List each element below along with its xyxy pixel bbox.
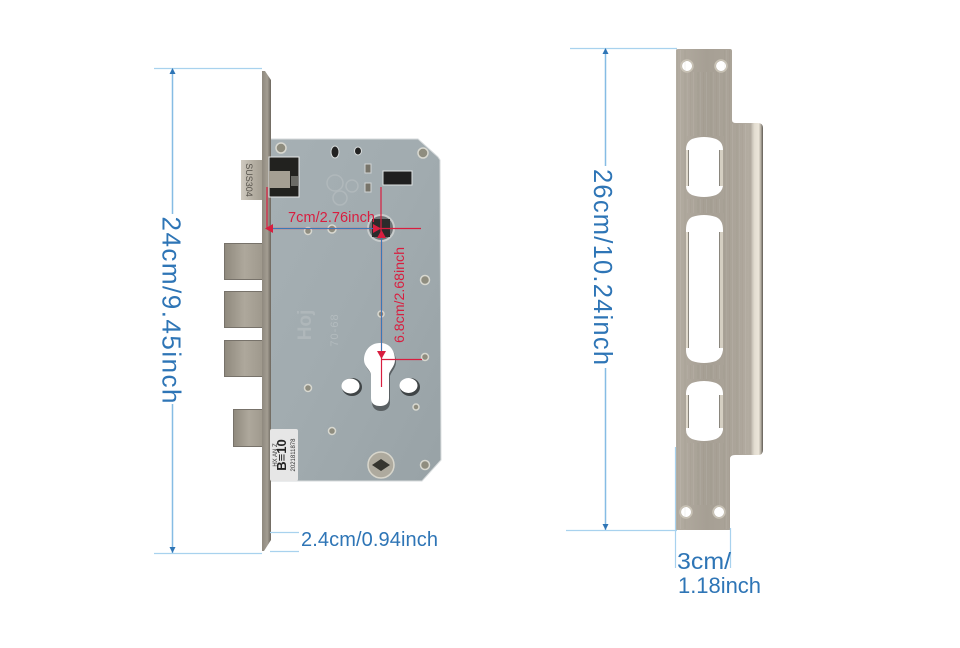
plate outline with slots and holes [676, 49, 763, 530]
right oval hole [400, 378, 420, 396]
product label: HX AN Z [273, 443, 279, 467]
product label: 2021811878 [291, 438, 297, 471]
strike plate width dimension [676, 447, 761, 598]
deadbolt 2 [224, 292, 264, 328]
lock mortise body [224, 71, 441, 551]
brushed metal texture [677, 50, 753, 529]
left oval hole [342, 378, 362, 396]
euro cylinder cutout [364, 343, 396, 411]
embossed brand text: Hoj [295, 310, 316, 340]
width label line 2: 1.18inch [678, 573, 761, 598]
faceplate width dimension [270, 529, 438, 552]
left height dimension [154, 68, 262, 554]
bottom keyhole screw [368, 452, 394, 478]
hole rings [680, 60, 727, 518]
deadbolt 1 [224, 244, 264, 280]
deadbolt 4 [234, 410, 264, 446]
latch bolt: SUS304 [244, 163, 254, 197]
spindle hub [368, 215, 394, 241]
slot bevels [686, 150, 723, 428]
small top holes [331, 146, 412, 192]
width label: 2.4cm/0.94inch [301, 529, 438, 551]
height label: 26cm/10.24inch [588, 169, 616, 365]
vertical red measure [377, 230, 422, 387]
vertical measure label: 6.8cm/2.68inch [391, 247, 407, 343]
strike plate [676, 49, 763, 530]
embossed model text: 70-68 [329, 313, 341, 347]
deadbolt 3 [224, 340, 264, 376]
product label: B≡10 [274, 439, 289, 471]
latch window [269, 157, 299, 197]
height label: 24cm/9.45inch [156, 216, 186, 404]
screws [276, 143, 430, 470]
right height dimension [566, 48, 677, 530]
product label [270, 429, 298, 481]
width label line 1: 3cm/ [677, 548, 732, 574]
embossed logo [327, 175, 358, 205]
grey case [268, 139, 441, 481]
faceplate [262, 71, 271, 551]
horizontal measure label: 7cm/2.76inch [288, 210, 375, 226]
latch bolt [241, 160, 265, 200]
horizontal red measure [265, 187, 421, 233]
